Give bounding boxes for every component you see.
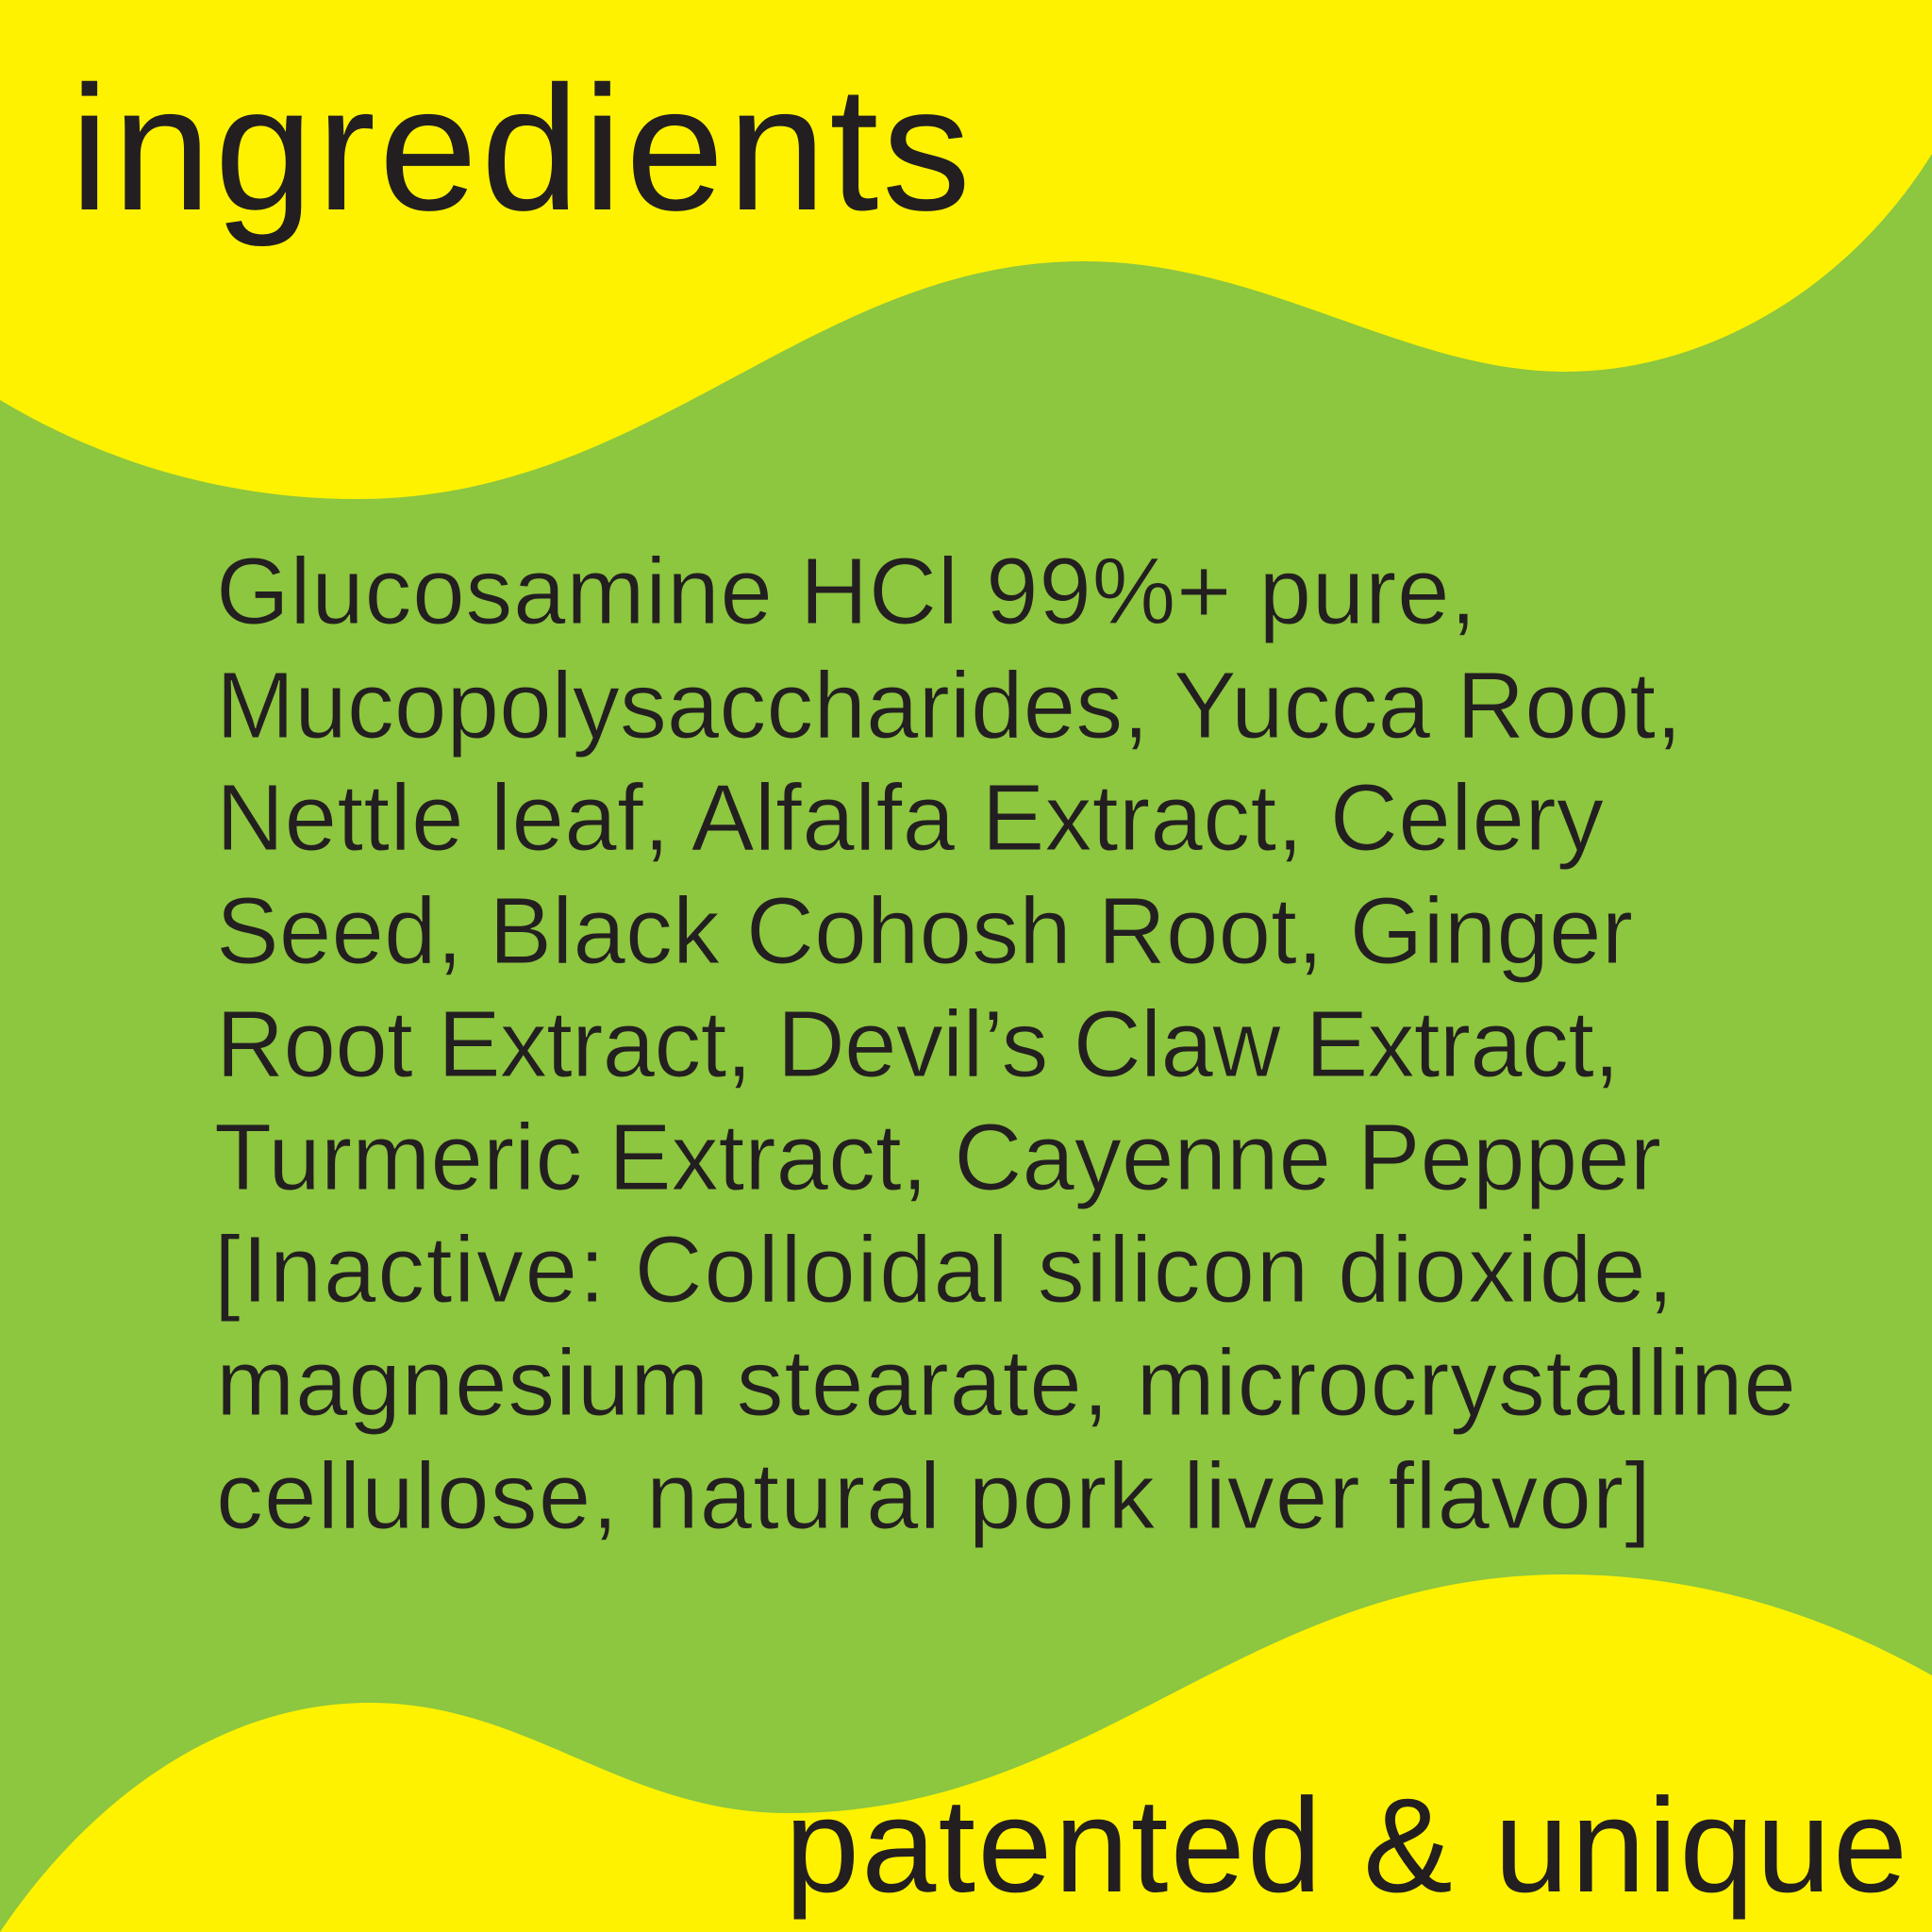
bottom yellow wave [0, 1574, 1932, 1932]
ingredients list text block: magnesium stearate, microcrystalline [216, 1330, 1796, 1436]
ingredients list text block [214, 539, 1796, 1549]
ingredients list text block: Root Extract, Devil’s Claw Extract, [216, 991, 1620, 1097]
ingredients list text block: [Inactive: Colloidal silicon dioxide, [214, 1217, 1674, 1323]
ingredients list text block: Turmeric Extract, Cayenne Pepper [214, 1105, 1661, 1210]
ingredients list text block: Mucopolysaccharides, Yucca Root, [216, 653, 1682, 758]
ingredients list text block: Glucosamine HCl 99%+ pure, [216, 539, 1476, 644]
top yellow wave [0, 0, 1932, 499]
ingredients list text block: Nettle leaf, Alfalfa Extract, Celery [216, 765, 1604, 871]
ingredients list text block: cellulose, natural pork liver flavor] [216, 1443, 1651, 1549]
ingredients list text block: Seed, Black Cohosh Root, Ginger [216, 878, 1633, 984]
footer tagline: patented & unique: patented & unique [785, 1771, 1907, 1921]
heading: ingredients: ingredients [70, 49, 971, 247]
